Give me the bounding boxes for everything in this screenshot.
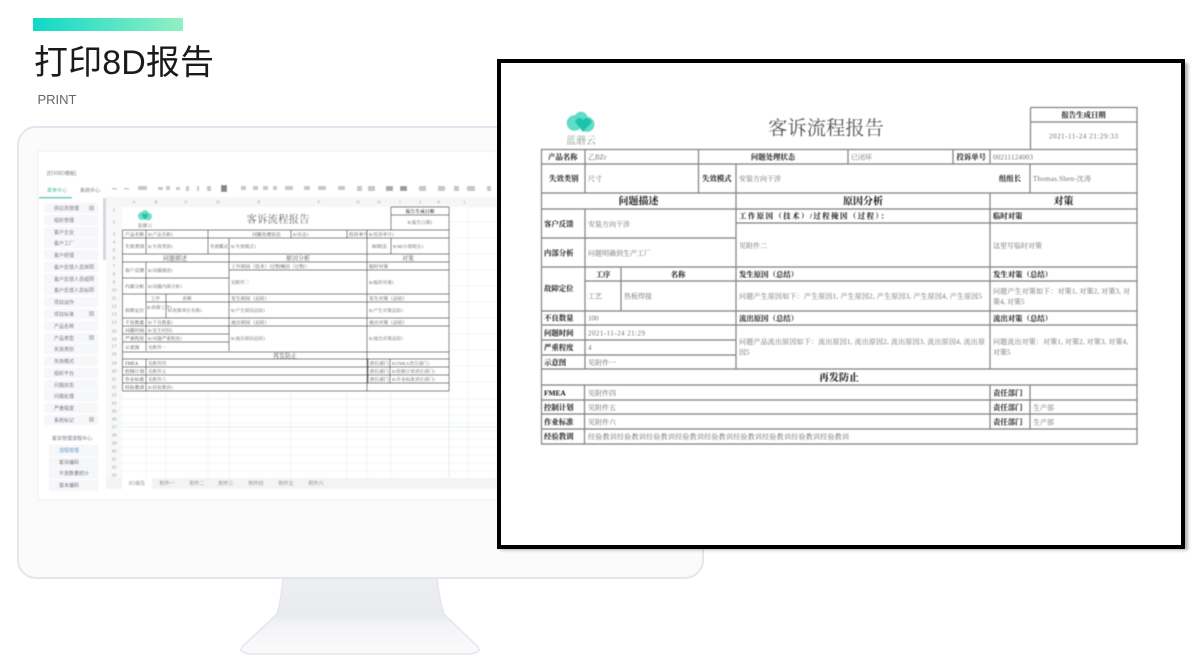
embedded sheet report	[122, 207, 449, 391]
column: cause analysis: 见附件二	[739, 241, 767, 250]
mini table text: FMEA	[125, 362, 139, 367]
row numbers: 11	[112, 296, 117, 300]
mini table text: 工作原因（技术）/过程掩因（过程）：	[231, 263, 311, 270]
column: countermeasures: 问题流出对策：对策1, 对策2, 对策3, 对策4,	[993, 337, 1128, 346]
mini logo: 蓝蘑云	[138, 222, 152, 229]
column: cause analysis: 因5	[739, 348, 750, 356]
sidebar menu	[44, 203, 98, 425]
row numbers: 8	[113, 272, 116, 276]
column header bar: L	[464, 200, 467, 204]
print report sheet	[499, 61, 1188, 550]
mini table text: 严重程度	[125, 335, 144, 342]
mini table text: 不良数量	[125, 319, 144, 326]
column header bar: F	[318, 200, 321, 204]
sidebar menu: 严重程度	[54, 405, 74, 412]
row numbers: 26	[111, 416, 117, 422]
mini table text: 责任部门	[370, 368, 389, 375]
mini table text: ${不良数量}	[148, 319, 173, 326]
row numbers: 29	[111, 440, 117, 446]
mini table text: ${投诉单号}	[369, 231, 394, 238]
column header bar: D	[216, 200, 220, 204]
mini table text: 问题描述	[163, 254, 187, 262]
sidebar section	[49, 435, 98, 491]
section: recurrence prevention: 生产部	[1033, 418, 1054, 426]
report date box: 报告生成日期	[1061, 110, 1106, 120]
report date box: 2021-11-24 21:29:33	[1049, 132, 1118, 140]
column: problem description: 示意图	[544, 358, 566, 367]
mini table text: ${产生原因总结}	[231, 307, 265, 314]
sidebar section: 基本编码	[59, 482, 79, 489]
column: countermeasures: 流出对策（总结）	[993, 314, 1052, 323]
row: header info: 失效类别	[549, 174, 579, 183]
column: problem description: 工艺	[588, 292, 602, 300]
mini table text: 流出对策（总结）	[369, 319, 407, 326]
sidebar section: 客诉编码	[59, 459, 79, 466]
sidebar tabs: 系统中心	[80, 187, 100, 194]
row numbers: 15	[111, 328, 117, 334]
report logo: 蓝蘑云	[566, 134, 596, 147]
mini logo	[138, 210, 152, 229]
sidebar menu: 产品名称	[54, 323, 74, 330]
mini table text: 名称	[182, 295, 192, 302]
mini table text: 作业标准	[125, 376, 144, 383]
column header bar: J	[419, 200, 421, 204]
column: problem description: 故障定位	[544, 284, 574, 293]
sidebar section: 客诉管理流程中心	[52, 435, 92, 442]
row: header info: Thomas.Shen-沈涛	[1033, 174, 1091, 183]
mini table text: ${问题内部分析}	[148, 283, 182, 290]
column: problem description: 名称	[671, 270, 686, 279]
mini table text: 内部分析	[125, 283, 144, 290]
column: problem description: 客户反馈	[544, 220, 574, 228]
mini table text: ${产品名称}	[148, 231, 173, 238]
row numbers: 22	[111, 384, 117, 390]
section: recurrence prevention	[544, 388, 1054, 441]
section: recurrence prevention: 责任部门	[993, 403, 1023, 412]
column: countermeasures	[993, 212, 1130, 356]
column: cause analysis: 问题产生原因如下：产生原因1, 产生原因2, 产生原因3, 产生原因4, 产生原因5	[739, 292, 982, 300]
section: recurrence prevention: 经验教训经验教训经验教训经验教训经验教训经验教训经验教训经验教训经验教训	[588, 432, 849, 441]
row numbers: 30	[111, 448, 117, 454]
column header bar: E	[257, 200, 261, 204]
mini table text: ${发生时间}	[148, 327, 173, 334]
mini title: 客诉流程报告	[246, 212, 310, 226]
sidebar menu: 组织平台	[54, 370, 74, 377]
sidebar scrollbar	[103, 198, 106, 260]
sidebar menu: 问题处理	[54, 393, 74, 400]
section headings: 问题描述	[618, 194, 659, 208]
column header bar: H	[377, 200, 381, 204]
row numbers: 10	[111, 288, 117, 292]
sidebar menu: 问题状态	[54, 382, 74, 389]
accent bar	[33, 18, 183, 31]
row numbers: 4	[113, 240, 116, 244]
mini table text: ${失效类别}	[148, 243, 173, 250]
sheet tabs	[106, 478, 497, 489]
monitor screen	[38, 151, 497, 500]
column: cause analysis: 问题产品流出原因如下：流出原因1, 流出原因2, 流出原因3, 流出原因4, 流出原	[739, 337, 985, 346]
column: problem description	[544, 220, 686, 367]
mini table text: 见附件五	[148, 368, 167, 375]
row: header info: 投诉单号	[956, 152, 987, 162]
sheet tabs: 附件一	[159, 480, 175, 487]
section: recurrence prevention: 生产部	[1033, 403, 1054, 412]
sheet tabs: 附件三	[218, 480, 234, 487]
mini table text: 发生原因（总结）	[231, 295, 269, 302]
column: problem description: 见附件一	[588, 358, 616, 367]
row numbers: 33	[111, 472, 117, 478]
mini table text: 原因分析	[286, 254, 310, 262]
sidebar menu: 客户企业	[54, 229, 74, 236]
sidebar tabs: 菜单中心	[47, 187, 67, 194]
mini table text: 临时对策	[369, 263, 388, 270]
mini table text	[125, 208, 435, 391]
section: recurrence prevention: 见附件六	[588, 418, 617, 426]
column: problem description: 不良数量	[544, 314, 574, 322]
column: problem description: 问题时间	[544, 328, 574, 338]
mini table text: 报告生成日期	[406, 208, 435, 215]
row: header info	[548, 152, 1091, 183]
row numbers: 6	[113, 256, 116, 260]
row: header info: 组组长	[999, 174, 1022, 183]
mini table text: 故障定位	[125, 307, 144, 314]
column: problem description: 4	[588, 344, 592, 352]
mini table text: ${流出对策总结}	[369, 335, 403, 342]
row: header info: 已闭环	[851, 152, 873, 162]
sidebar tabs	[39, 187, 100, 198]
column: problem description: 内部分析	[544, 248, 574, 258]
mini table text: 责任部门	[370, 376, 389, 383]
mini table text: ${作业标准责任部门}	[392, 376, 435, 383]
sidebar menu: 客户反馈人员组	[54, 276, 89, 283]
mini table text: 问题时间	[125, 327, 144, 334]
column: problem description: 严重程度	[544, 343, 574, 352]
mini table text: 示意图	[125, 344, 140, 351]
row numbers: 19	[111, 360, 117, 366]
row numbers: 17	[111, 344, 117, 348]
column: countermeasures: 策4, 对策5	[993, 297, 1025, 306]
mini table text: 见附件一	[148, 344, 167, 351]
row numbers: 20	[111, 368, 117, 374]
subtitle: PRINT	[38, 92, 77, 107]
mini table text: ${报告日期}	[407, 219, 433, 226]
mini table text: 产品名称	[125, 231, 144, 238]
toolbar	[112, 185, 491, 192]
monitor body	[18, 127, 703, 578]
mini table text: ${状态}	[293, 231, 309, 238]
mini table text: ${问题严重程度}	[148, 335, 182, 342]
sheet tabs: 附件四	[248, 480, 264, 487]
section headings: 原因分析	[843, 194, 883, 208]
column: countermeasures: 临时对策	[993, 212, 1023, 220]
mini table text: ${故障工序}	[147, 304, 172, 311]
mini table text: ${故障单位名称}	[168, 307, 202, 314]
column header bar: I	[399, 200, 401, 204]
row numbers: 25	[111, 408, 117, 414]
mini table text: 责任部门	[370, 360, 389, 367]
sidebar menu: 系统标记	[54, 417, 74, 424]
report date box	[1030, 108, 1137, 149]
row: header info: 尺寸	[588, 174, 602, 183]
screen heading: [打印8D模板]	[47, 170, 77, 177]
column header bar: G	[356, 200, 360, 204]
row numbers: 27	[111, 424, 117, 430]
sidebar menu: 客户反馈人员库	[54, 264, 89, 271]
section: recurrence prevention: 责任部门	[993, 418, 1023, 426]
report logo	[566, 112, 596, 147]
column: cause analysis	[739, 212, 985, 356]
mini table text: 发生对策（总结）	[369, 295, 407, 302]
column: cause analysis: 工作原因（技术）/过程掩因（过程）：	[739, 212, 888, 220]
section: recurrence prevention: 责任部门	[993, 388, 1023, 398]
mini table text: ${流出原因总结}	[231, 335, 265, 342]
mini table text: ${FMEA责任部门}	[392, 360, 430, 367]
report table	[542, 150, 1137, 444]
sidebar menu: 项目标准	[54, 311, 74, 318]
row numbers: 32	[111, 464, 117, 470]
mini table text: 再发防止	[273, 352, 297, 360]
row numbers: 3	[113, 232, 116, 236]
sidebar menu: 组织管理	[54, 217, 74, 224]
section headings: 对策	[1054, 194, 1074, 208]
sidebar menu: 失效类别	[54, 346, 74, 353]
mini table text: 工序	[150, 295, 160, 302]
row: header info: 问题处理状态	[751, 152, 796, 162]
column header bar: C	[184, 200, 188, 204]
sidebar menu: 客户反馈人员标	[54, 287, 89, 294]
row numbers: 5	[113, 248, 116, 252]
column: problem description: 问题明确到生产工厂	[588, 248, 651, 258]
mini table text: ${临时对策}	[369, 279, 394, 286]
row numbers: 24	[111, 400, 117, 406]
row numbers: 12	[111, 304, 117, 308]
row numbers: 28	[111, 432, 117, 438]
mini table text: 8D组长	[372, 243, 388, 250]
mini table text: 控制计划	[125, 368, 144, 375]
row numbers: 9	[113, 280, 116, 284]
mini table text: ${失效模式}	[231, 243, 256, 250]
mini table text: 经验教训	[125, 384, 144, 391]
row: header info: 安装方向干涉	[739, 174, 781, 183]
mini table text: ${经验教训}	[148, 384, 173, 391]
row numbers: 2	[113, 220, 116, 224]
sidebar menu: 供应商管理	[54, 205, 79, 212]
column: countermeasures: 对策5	[993, 348, 1011, 356]
section: recurrence prevention: 见附件四	[588, 388, 616, 398]
column header bar: B	[154, 200, 158, 204]
column header bar: A	[132, 200, 136, 204]
row numbers: 23	[111, 392, 117, 398]
row numbers: 18	[111, 352, 117, 356]
monitor stand	[241, 577, 479, 654]
mini table text: ${产生对策总结}	[369, 307, 403, 314]
row: header info: 失效模式	[702, 174, 732, 183]
column: countermeasures: 这里写临时对策	[993, 241, 1042, 250]
sidebar menu: 项目运作	[54, 299, 74, 306]
column: cause analysis: 发生原因（总结）	[739, 270, 798, 279]
section headings	[618, 194, 1074, 384]
mini table text: 失效类别	[125, 243, 144, 250]
mini table text: ${控制计划责任部门}	[392, 368, 435, 375]
column header bar	[106, 197, 497, 207]
column header bar: K	[437, 200, 441, 204]
row numbers: 14	[111, 320, 117, 324]
row: header info: 00211124003	[993, 154, 1034, 162]
report title: 客诉流程报告	[768, 118, 884, 140]
mini table text: 失效模式	[210, 243, 228, 250]
section: recurrence prevention: 经验教训	[544, 432, 574, 441]
mini table text: ${8D小组组长}	[393, 243, 424, 250]
mini table text: 问题处理状态	[252, 231, 281, 238]
title: 打印8D报告	[34, 44, 214, 82]
sidebar menu: 客户工厂	[54, 240, 74, 247]
mini table text: ${问题描述}	[148, 267, 173, 274]
section headings: 再发防止	[819, 371, 859, 384]
sheet tabs: 附件二	[189, 480, 205, 487]
column: problem description: 2021-11-24 21:29	[588, 330, 646, 338]
row numbers: 31	[111, 456, 117, 462]
row numbers: 16	[111, 336, 117, 342]
sheet tabs: 8D报告	[129, 480, 145, 487]
mini table text: 投诉单号	[349, 231, 368, 238]
row numbers: 7	[113, 264, 116, 268]
row numbers: 1	[113, 208, 116, 212]
column: problem description: 热板焊接	[624, 292, 652, 300]
column: problem description: 100	[588, 314, 599, 322]
mini table text: 对策	[402, 254, 414, 262]
sidebar menu: 客户经理	[54, 252, 74, 259]
mini table text: 流出原因（总结）	[231, 319, 269, 326]
column: problem description: 安装方向干涉	[588, 220, 630, 228]
mini table text: 见附件六	[148, 376, 167, 383]
sidebar menu: 失效模式	[54, 358, 74, 365]
row: header info: 产品名称	[548, 152, 578, 162]
column: cause analysis: 流出原因（总结）	[739, 314, 798, 323]
row numbers: 13	[111, 312, 117, 316]
row numbers	[106, 207, 122, 478]
row: header info: 乙BZr	[588, 154, 607, 162]
row numbers: 21	[111, 376, 117, 382]
mini table text: 见附件二	[231, 279, 250, 286]
sidebar section: 不良数量统计	[59, 470, 89, 477]
column: problem description: 工序	[596, 270, 611, 279]
sidebar section: 流程管理	[59, 447, 79, 454]
column: countermeasures: 问题产生对策如下：对策1, 对策2, 对策3, 对	[993, 286, 1130, 296]
mini table text: 客户反馈	[125, 267, 144, 274]
section: recurrence prevention: FMEA	[544, 388, 566, 398]
section: recurrence prevention: 见附件五	[588, 403, 616, 412]
sheet tabs: 附件五	[278, 480, 294, 487]
section: recurrence prevention: 控制计划	[544, 403, 574, 412]
table grid	[542, 150, 1137, 444]
section: recurrence prevention: 作业标准	[544, 418, 574, 426]
sheet tabs: 附件六	[308, 480, 324, 487]
column: countermeasures: 发生对策（总结）	[993, 270, 1052, 279]
mini table text: 见附件四	[148, 360, 167, 367]
sidebar menu: 产品类型	[54, 335, 74, 342]
mini table lines	[122, 207, 449, 391]
